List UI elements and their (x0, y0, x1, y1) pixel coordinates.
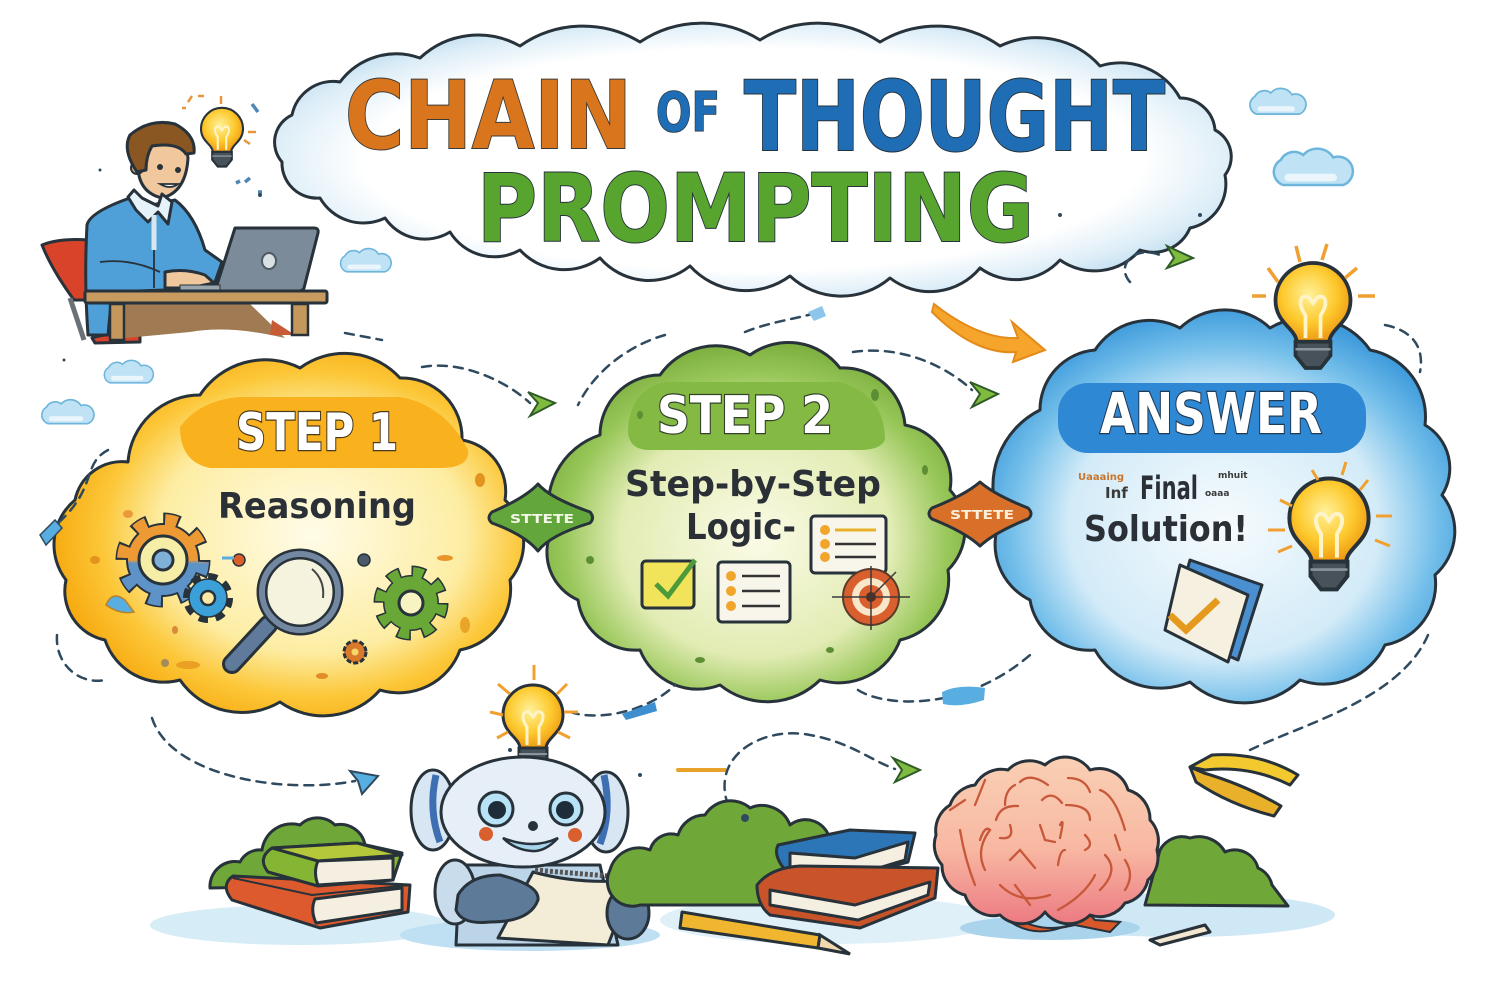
robot hands (456, 875, 538, 922)
heading: step 1: STEP 1 (236, 403, 398, 463)
icon: checklist card (811, 516, 886, 573)
label: step-by-step logic: Step-by-Step (625, 464, 881, 505)
person at laptop (42, 122, 327, 343)
brain folds (950, 778, 1130, 910)
brain body (934, 757, 1158, 924)
icon: robot lightbulb (490, 665, 578, 769)
label: step-by-step logic: Logic- (686, 507, 796, 548)
title: of: OF (656, 81, 720, 144)
head (138, 128, 188, 198)
icon: magnifying glass (232, 554, 338, 664)
green book (263, 843, 402, 886)
connector: orange badge (929, 482, 1031, 546)
laptop (215, 228, 318, 291)
decorative small clouds (42, 88, 1353, 424)
table (85, 291, 327, 303)
icon: notebook with check (1165, 560, 1262, 662)
arrow: books to brain (678, 733, 920, 820)
books left with bush (210, 818, 410, 928)
icon: list card (718, 562, 790, 622)
connector: orange badge: STTETE (950, 508, 1014, 522)
dashed paths: trailing connectors (40, 246, 1428, 750)
title: Chain: CHAIN (345, 62, 632, 171)
label: final solution: Final (1140, 469, 1198, 507)
hands (165, 271, 214, 288)
shirt (86, 198, 222, 335)
red book (226, 876, 410, 928)
panel: step 2 logic (547, 342, 965, 702)
icon: green gear (381, 573, 441, 633)
icon: top lightbulb (1252, 244, 1375, 368)
ground shadow (150, 893, 1335, 951)
robot eyes (479, 792, 582, 851)
icon: answer lightbulb (1268, 462, 1392, 589)
panel: answer (993, 310, 1455, 703)
green speckles (586, 389, 928, 663)
label: final solution: mhuit (1218, 471, 1248, 481)
icon: person's lightbulb (182, 96, 262, 192)
robot paper (498, 872, 633, 945)
arrow: step 1 to step 2 (422, 366, 555, 416)
answer banner (1058, 383, 1366, 453)
chair (42, 240, 88, 300)
label: reasoning: Reasoning (218, 486, 416, 527)
icon: small orange gear (90, 473, 485, 679)
bush (607, 801, 830, 906)
blue book (777, 830, 915, 878)
robot head (441, 757, 605, 867)
robot ears (411, 770, 628, 852)
label: final solution: Inf (1105, 484, 1128, 502)
step 2 banner (628, 382, 885, 450)
title: Thought: THOUGHT (744, 61, 1165, 173)
collar (128, 190, 172, 224)
label: step-by-step logic (625, 464, 881, 548)
connector: green badge (489, 484, 592, 551)
robot with lightbulb (411, 665, 649, 945)
arrow: title to answer (932, 304, 1045, 362)
decorative specks (62, 168, 1202, 822)
icon: eraser (1150, 925, 1210, 945)
title: Prompting: PROMPTING (477, 155, 1034, 264)
label: final solution (1078, 469, 1248, 550)
arrow: step 1 to robot (152, 718, 378, 794)
connector: green badge: STTETE (510, 512, 574, 526)
icon: large gear (123, 520, 203, 600)
heading: step 2: STEP 2 (657, 386, 833, 446)
icon: target (832, 566, 910, 630)
label: final solution: oaaa (1205, 489, 1229, 499)
step 1 banner (180, 397, 468, 468)
title cloud (275, 23, 1231, 296)
robot body (456, 865, 618, 945)
label: final solution: Uaaaing (1078, 472, 1124, 483)
bush beside brain (1145, 837, 1288, 906)
arrow: step 2 to answer (853, 351, 998, 407)
icon: note with checkmark (642, 560, 695, 608)
brain stem (1005, 905, 1120, 932)
icon: banana-shaped peel (1190, 755, 1298, 816)
icon: pencil (680, 912, 850, 954)
heading: answer: ANSWER (1100, 382, 1322, 447)
bush (210, 818, 372, 888)
books center with bush (607, 801, 938, 928)
red book (757, 866, 938, 928)
illustration: brain (934, 757, 1288, 932)
icon: small gear (188, 578, 228, 618)
panel: step 1 reasoning (54, 353, 524, 716)
trousers (125, 304, 285, 338)
label: final solution: Solution! (1084, 509, 1248, 550)
